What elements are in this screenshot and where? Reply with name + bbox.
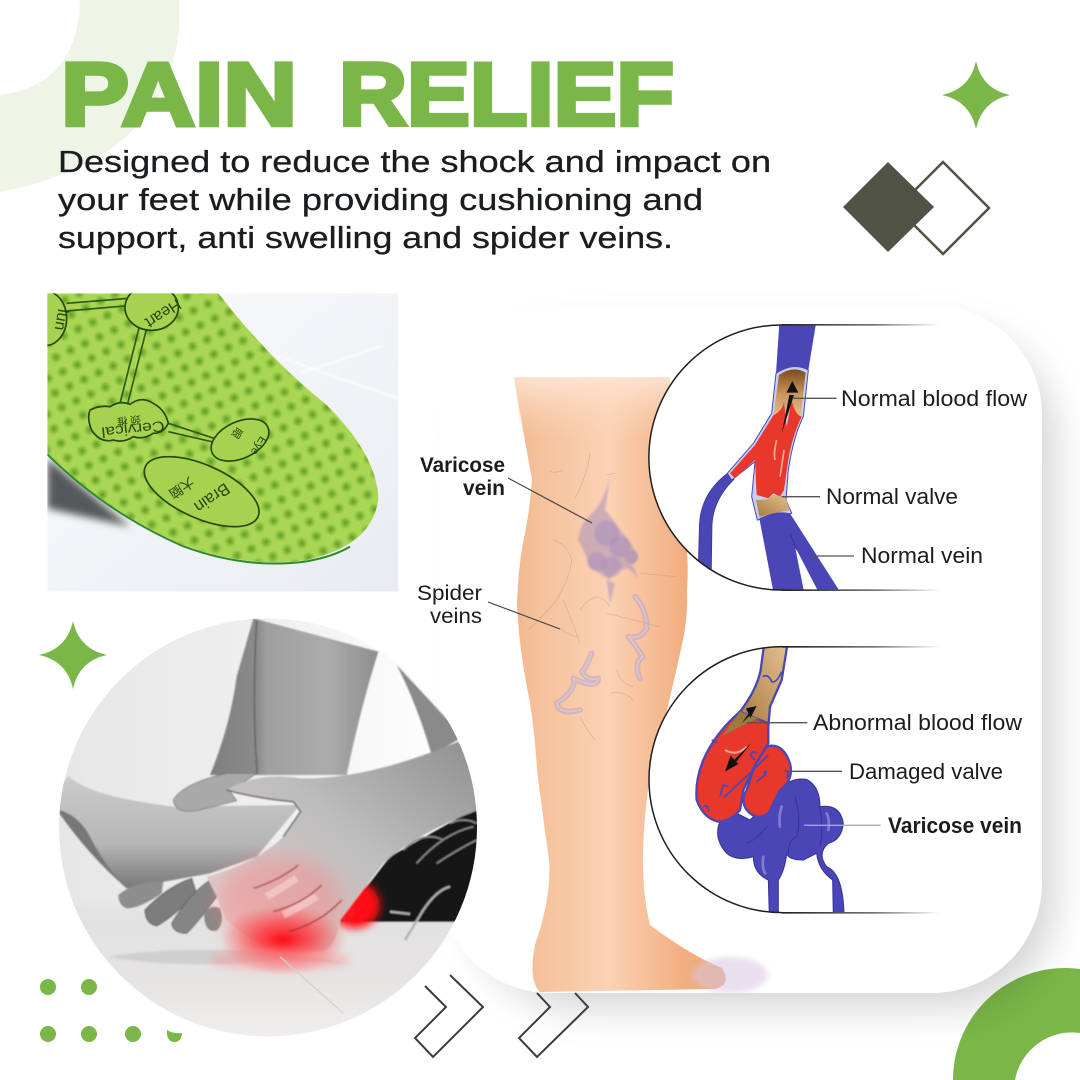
inset 1 labels: Normal vein (861, 543, 983, 568)
acupoint: lung: lun (51, 308, 71, 332)
leader lines (488, 478, 592, 629)
description text: Designed to reduce the shock and impact on (58, 144, 771, 179)
finger creases (253, 865, 342, 932)
decorative ring: bottom right (953, 968, 1080, 1080)
leg labels: Spider (417, 581, 482, 605)
circle outline (649, 325, 781, 590)
leg labels: vein (463, 476, 505, 500)
holding hand (207, 742, 478, 953)
connector lines (67, 298, 214, 442)
acupoint: brain: 大脑 (166, 474, 197, 502)
acupoint: eye: 眼 (228, 425, 244, 441)
inset: normal vein (649, 323, 940, 592)
leg labels: veins (430, 604, 482, 628)
standing leg (210, 618, 378, 775)
red blood (730, 400, 802, 498)
panel: foot pain photo (50, 610, 490, 1050)
spider veins (528, 453, 677, 740)
icon: sparkle star top right (942, 61, 1010, 129)
shoe (330, 807, 478, 940)
lower blue veins (759, 512, 840, 592)
vein wall (727, 367, 808, 520)
insole body (47, 293, 381, 570)
circle outline (649, 647, 782, 913)
lifted foot (59, 776, 300, 888)
tortuous veins (557, 597, 647, 711)
acupoint: eye (210, 418, 270, 462)
inset 2 labels: Varicose vein (888, 813, 1022, 838)
acupoint: brain (144, 456, 260, 528)
tan upper vein (740, 645, 787, 727)
leg labels: Varicose (420, 453, 505, 477)
inset 2 labels: Abnormal blood flow (813, 710, 1023, 735)
damaged valve flaps (703, 740, 788, 812)
flow arrow (782, 381, 798, 433)
acupoint: cervical: Cervical (101, 417, 165, 440)
decorative ring: top left (0, 0, 179, 192)
title (61, 44, 674, 144)
leg labels (417, 453, 505, 628)
floor tile line (280, 957, 343, 1013)
thumb on top (173, 773, 257, 811)
acupoint: cervical: 颈 椎 (116, 413, 142, 428)
flow arrows (725, 706, 757, 772)
title: PAIN (61, 44, 297, 144)
supporting hand fingers (118, 878, 222, 933)
inset 1 labels: Normal blood flow (841, 386, 1028, 411)
vein cluster (578, 477, 638, 603)
lower tan chamber (756, 495, 790, 517)
icon: sparkle star left (39, 621, 107, 689)
inset 2 labels (813, 710, 1023, 838)
inset 2 labels: Damaged valve (849, 759, 1003, 784)
inset 1 labels: Normal valve (826, 484, 958, 509)
panel: white vein card (440, 305, 1055, 1008)
red pain glow (210, 857, 350, 975)
description text (58, 144, 771, 255)
leader lines (782, 398, 854, 556)
varicose cluster and veins (528, 453, 677, 740)
far leg (397, 665, 463, 755)
decorative dots (40, 979, 182, 1042)
vein branch (698, 473, 734, 573)
acupoint: eye: Eye (248, 434, 268, 457)
inset: varicose vein (649, 645, 940, 915)
acupoint: heart (124, 293, 182, 332)
upper blue vein (776, 323, 816, 373)
inset 1 labels (826, 386, 1028, 568)
bulging blue veins (718, 779, 844, 915)
red blob lower (743, 746, 791, 817)
decorative chevrons (415, 975, 588, 1057)
acupoint: heart: Heart (141, 295, 184, 331)
illustration: leg (488, 377, 768, 993)
panel: insole photo (23, 285, 398, 592)
acupoint: brain: Brain (191, 479, 233, 517)
description text: your feet while providing cushioning and (58, 182, 703, 217)
red blob upper (696, 712, 768, 822)
title: RELIEF (339, 44, 674, 144)
description text: support, anti swelling and spider veins. (58, 220, 673, 255)
icon: overlapping diamonds (843, 162, 989, 254)
leader lines (747, 723, 842, 771)
acupoint: cervical (89, 400, 168, 441)
acupoint: lung (47, 293, 70, 346)
brown chamber (773, 369, 806, 417)
